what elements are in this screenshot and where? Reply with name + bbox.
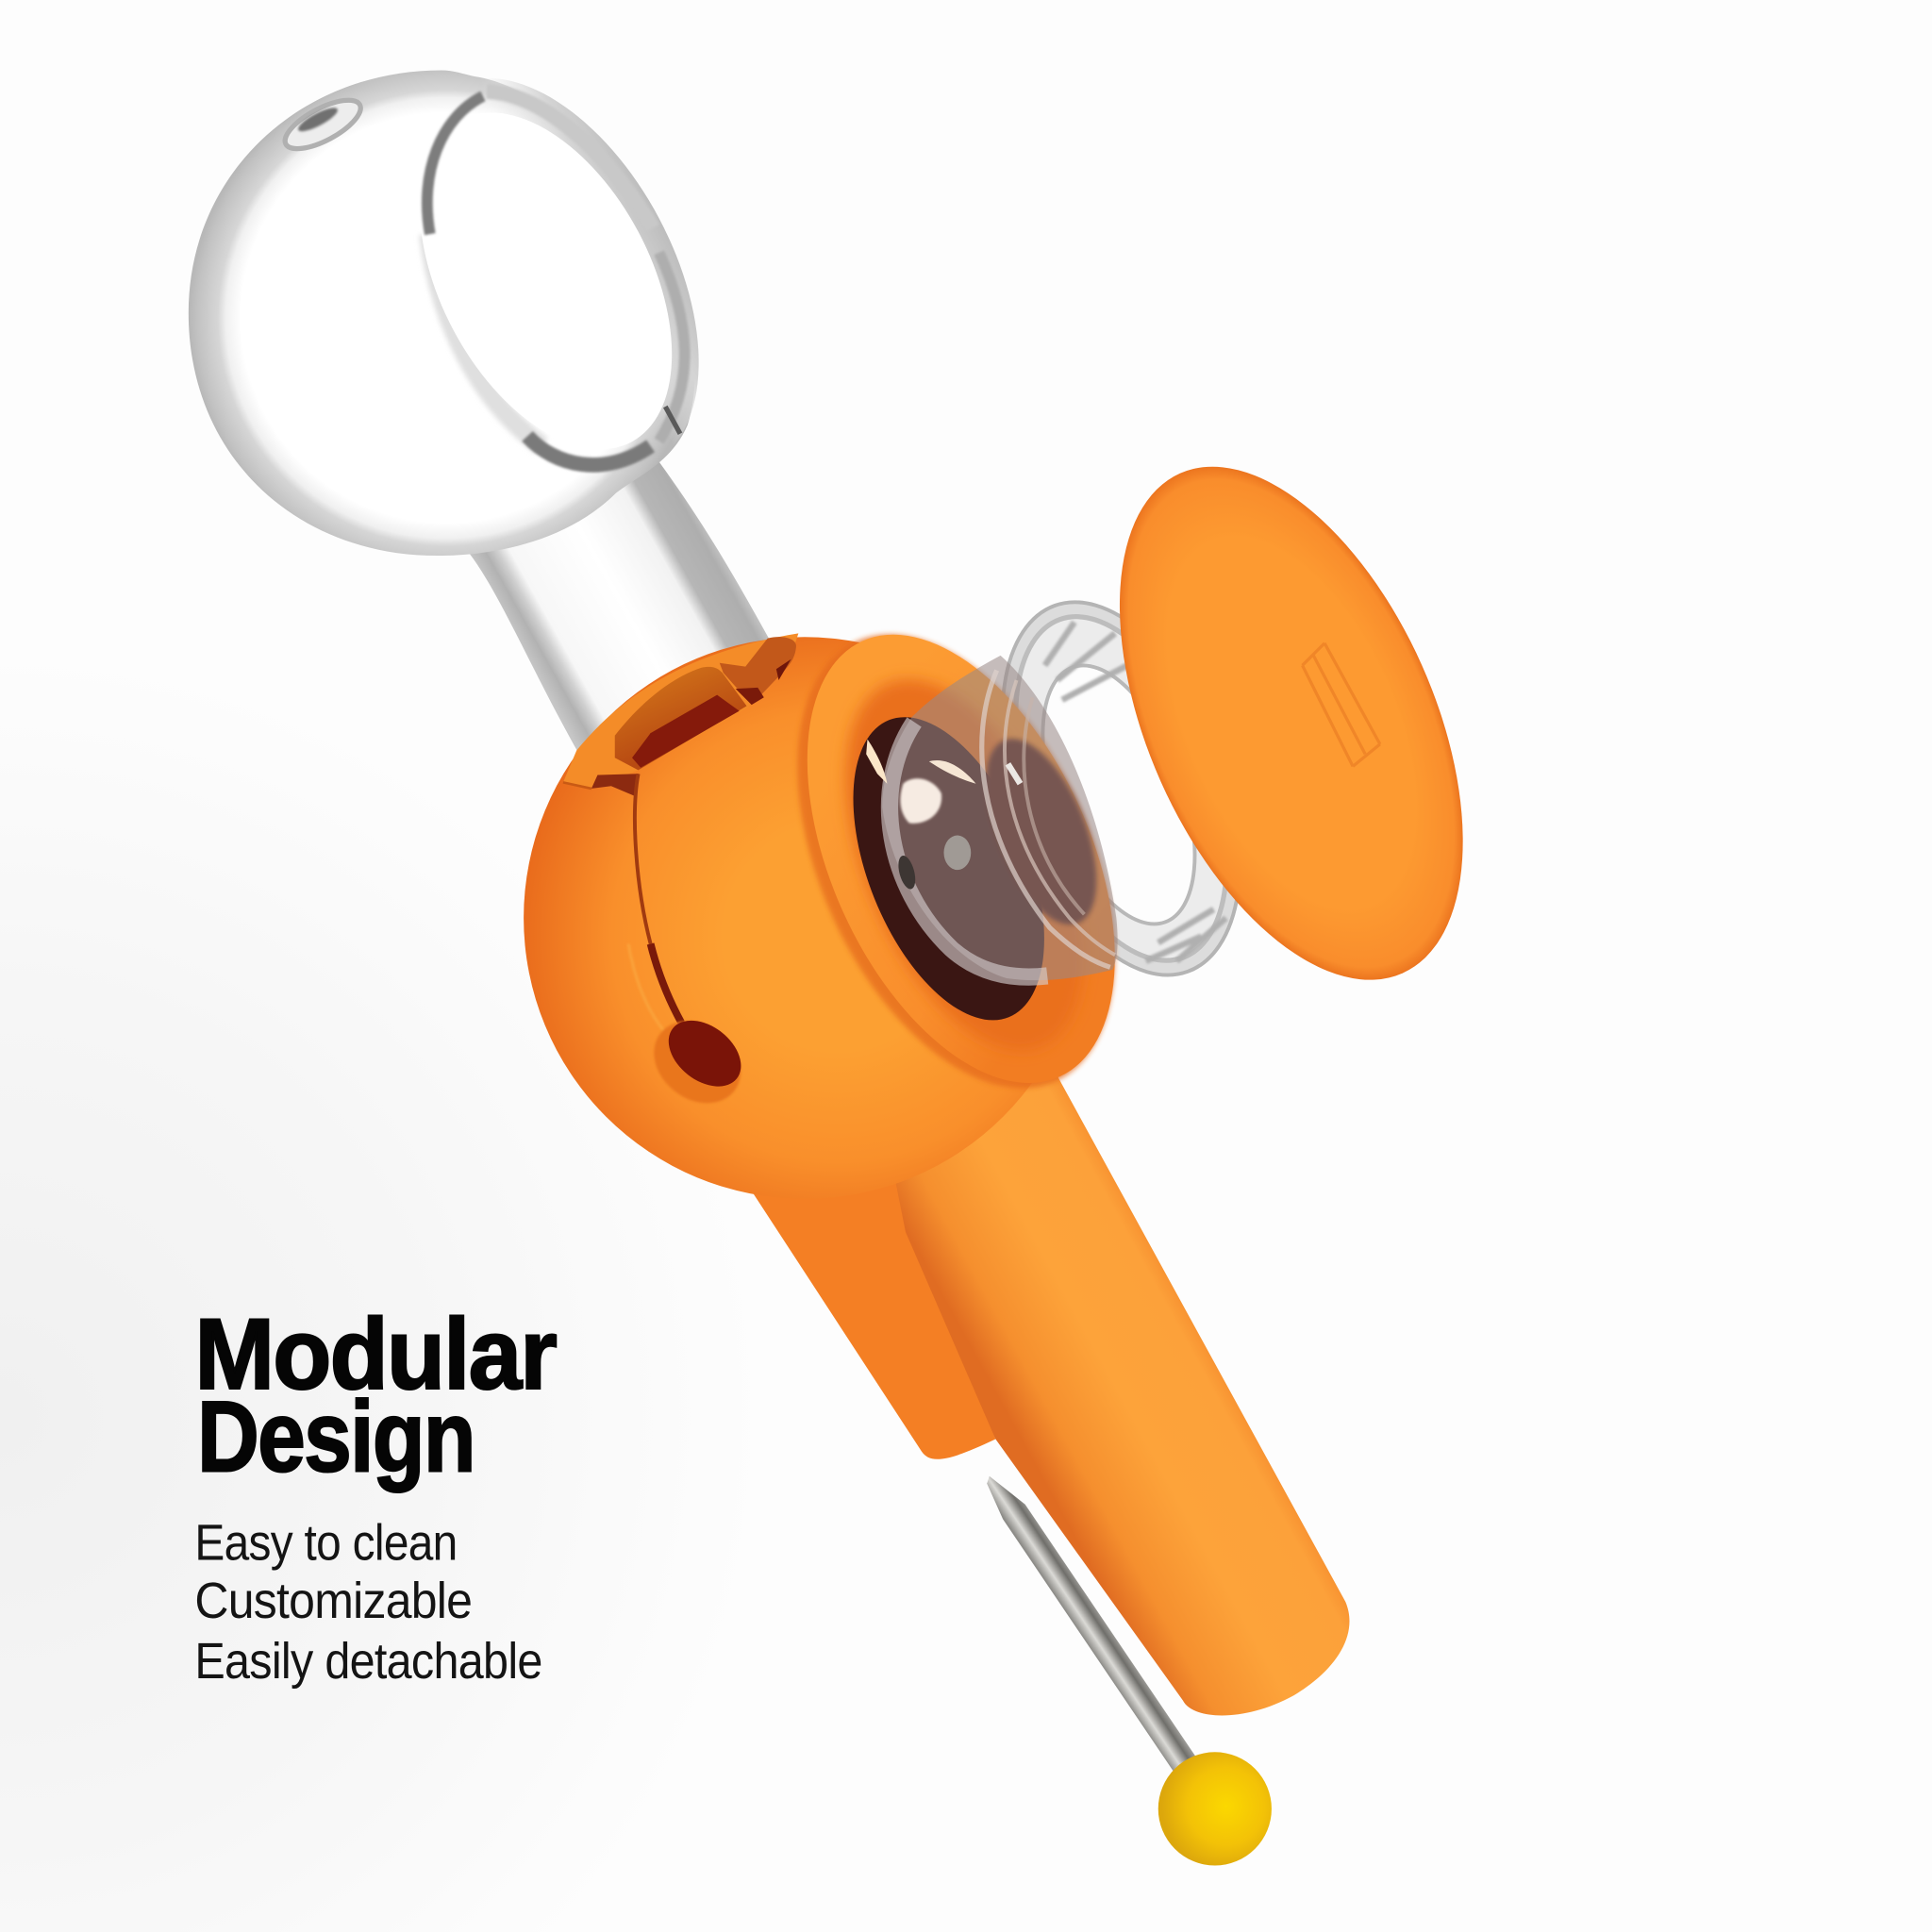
carb hole bbox=[278, 91, 367, 158]
jar body bbox=[882, 656, 1118, 980]
collar groove shadow bbox=[733, 585, 1179, 1137]
needle bbox=[987, 1476, 1198, 1774]
feature list: Customizable bbox=[194, 1574, 472, 1629]
icon: glass bowl and stem bbox=[189, 31, 770, 754]
feature list: Easily detachable bbox=[194, 1634, 542, 1690]
glass bulb bbox=[189, 70, 695, 556]
glass jar insert bbox=[866, 656, 1118, 980]
handle body bbox=[748, 1062, 1349, 1715]
yellow ball bbox=[1158, 1752, 1272, 1865]
bowl rim bbox=[351, 31, 758, 516]
handle fin bbox=[748, 1171, 995, 1459]
title: Modular bbox=[194, 1297, 557, 1410]
orange spherical head bbox=[524, 633, 1086, 1199]
orange disc cap bbox=[1049, 415, 1533, 1031]
glass jar flange ring bbox=[957, 570, 1286, 1008]
poker tool bbox=[987, 1476, 1272, 1865]
reflections bbox=[866, 740, 1020, 891]
seam line bbox=[563, 774, 681, 1033]
collar and cavity bbox=[733, 585, 1179, 1137]
collar recess bbox=[797, 645, 1133, 1085]
feature list: Easy to clean bbox=[194, 1516, 458, 1572]
top slot opening bbox=[563, 633, 798, 796]
title: Design bbox=[197, 1380, 475, 1493]
glass stem bbox=[468, 462, 770, 754]
title bbox=[194, 1297, 557, 1493]
embossed logo bbox=[1303, 643, 1380, 766]
jar front lip bbox=[890, 722, 1047, 977]
bulb highlight bbox=[394, 340, 431, 394]
feature list bbox=[194, 1516, 542, 1690]
dark red cavity wall bbox=[963, 724, 1119, 940]
handle tube bbox=[862, 1062, 1349, 1715]
dark cavity bbox=[814, 691, 1083, 1047]
jar threads bbox=[982, 671, 1115, 967]
collar rim bbox=[744, 588, 1177, 1130]
keyhole bbox=[638, 1004, 758, 1120]
